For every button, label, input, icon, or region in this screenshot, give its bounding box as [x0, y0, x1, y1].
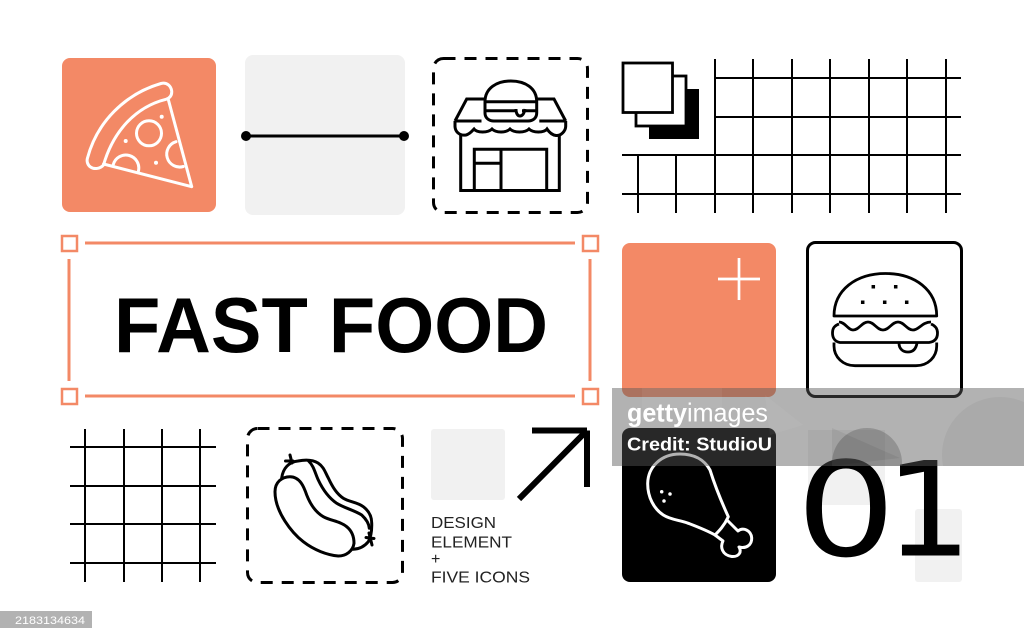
icon: pizza slice — [87, 83, 192, 187]
arrow: up-right — [519, 430, 587, 499]
panel: dashed store tile — [434, 58, 588, 212]
badge: image id: 2183134634 — [15, 615, 85, 627]
panel: burger tile — [808, 242, 962, 396]
icon: chicken drumstick — [648, 454, 752, 557]
number: 01: 0 — [796, 434, 896, 586]
panel: grey blocks behind number — [808, 430, 962, 582]
text block: design element + five icons: DESIGN — [431, 515, 496, 532]
watermark: gettyimages: gettyimages — [627, 398, 768, 428]
icon: burger — [832, 274, 938, 366]
watermark: credit: Credit: StudioU — [627, 434, 772, 454]
text block: design element + five icons — [431, 515, 530, 586]
watermark band — [612, 388, 1024, 466]
panel: chicken leg tile — [622, 428, 776, 582]
text block: design element + five icons: ELEMENT — [431, 534, 512, 552]
text block: design element + five icons: FIVE ICONS — [431, 570, 530, 586]
panel: small grey square — [431, 429, 505, 500]
number: 01 — [796, 434, 972, 586]
decorative grid: top right — [622, 59, 961, 213]
icon: burger store — [455, 81, 566, 190]
icon: stacked squares — [623, 63, 699, 139]
panel: pizza icon tile — [62, 58, 216, 212]
badge: image id — [0, 611, 92, 628]
number: 01: 1 — [885, 434, 972, 586]
icon: hot dog — [275, 455, 374, 556]
panel: dashed hot dog tile — [248, 428, 402, 582]
panel: coral square with plus — [622, 243, 776, 397]
title: FAST FOOD — [114, 281, 548, 369]
panel: title frame — [62, 236, 598, 404]
text block: design element + five icons: + — [431, 551, 440, 568]
decorative grid: bottom left — [70, 429, 216, 582]
panel: grey square with connector line — [241, 55, 409, 215]
